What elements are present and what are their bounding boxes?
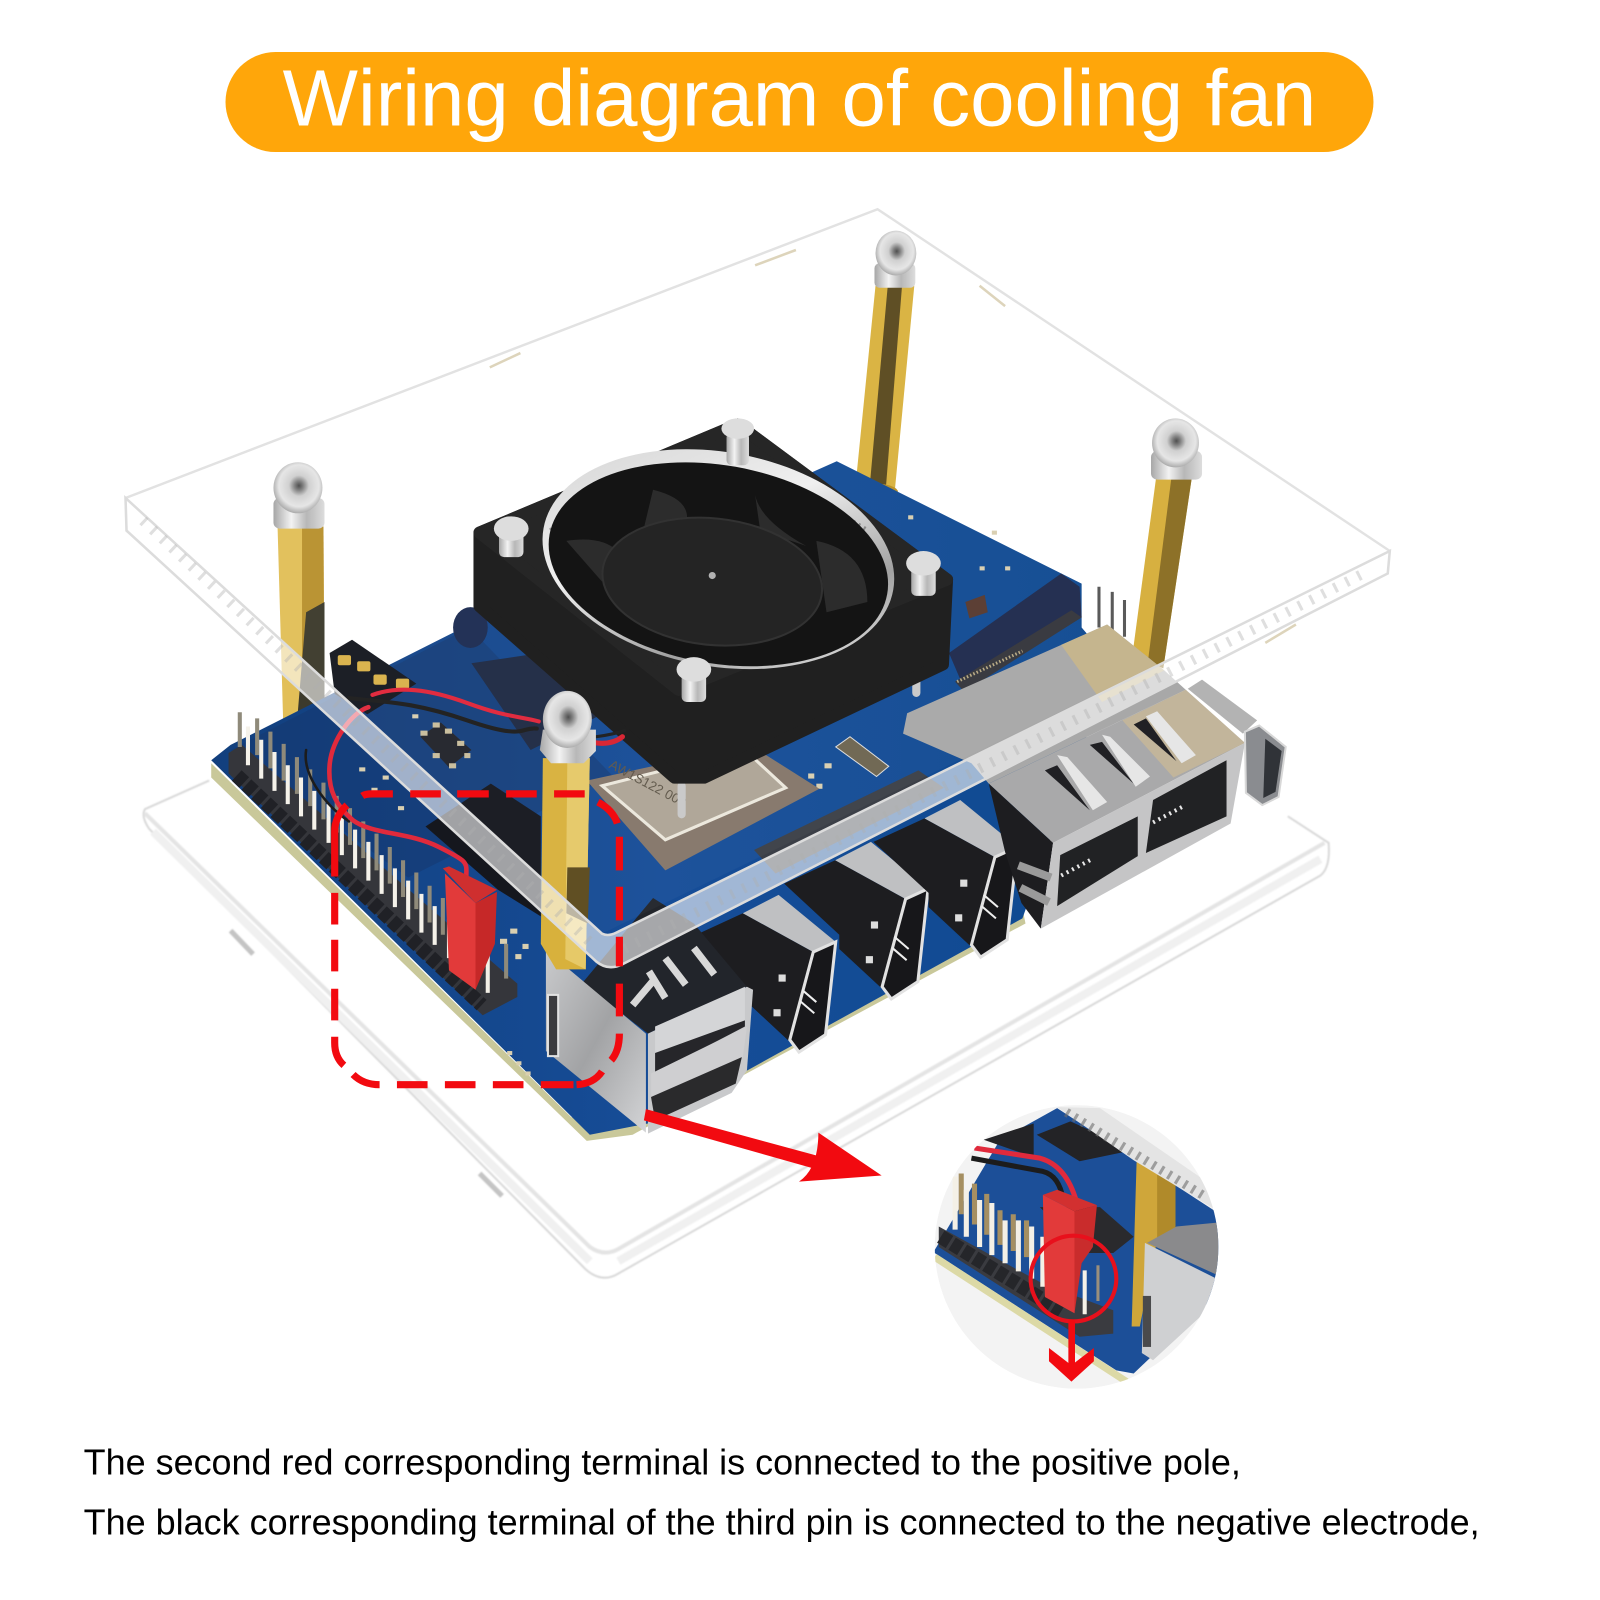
inset wires: [971, 1158, 1063, 1200]
instruction line 1: The second red corresponding terminal is connected to the positive pole,: [84, 1441, 1241, 1482]
polarity arrow: [1049, 1319, 1094, 1382]
ethernet, HDMI and USB ports: [546, 624, 1286, 1134]
cooling fan: [480, 418, 947, 778]
front row pins: [248, 727, 449, 958]
standoff: left: [273, 462, 324, 740]
audio connector with gold contacts: [330, 640, 416, 714]
double USB-A port: [546, 898, 753, 1134]
dark reflection behind HDMI: [754, 770, 944, 873]
HDMI port 2: [784, 842, 928, 999]
rear row pins: [240, 712, 443, 935]
title pill: [226, 52, 1373, 152]
top acrylic plate: [126, 209, 1390, 967]
power capacitor: [453, 607, 488, 648]
fan screws: [494, 418, 941, 702]
dashed selection box: [335, 794, 619, 1085]
ribbon connector: [836, 737, 889, 777]
M.2 slot: [949, 573, 1082, 692]
pin highlight circle: [1031, 1236, 1116, 1321]
board edge: [211, 763, 1026, 1141]
bottom acrylic plate: [144, 781, 1329, 1278]
inset board: [935, 1108, 1218, 1373]
red jumper connector: [443, 866, 497, 990]
instruction line 2: The black corresponding terminal of the third pin is connected to the negative electrode,: [84, 1502, 1480, 1543]
standoff: right: [1133, 418, 1202, 668]
fan frame top face: [480, 424, 947, 690]
inset chips: [1037, 1121, 1134, 1161]
inset USB shell: [1147, 1222, 1218, 1276]
inset third pin: [1083, 1270, 1087, 1314]
acrylic fan ring: [525, 423, 912, 696]
small surface components: [359, 515, 1010, 1076]
HDMI port 1: [692, 895, 836, 1052]
USB-C port: [1188, 680, 1286, 805]
inset board edge: [935, 1257, 1127, 1382]
circuit board: [211, 461, 1112, 1141]
hub centre dot: [709, 572, 716, 579]
ethernet rear block: [903, 624, 1186, 784]
arrow to detail view: [644, 1109, 882, 1182]
board top surface: [211, 461, 1112, 1135]
ethernet front block: [989, 690, 1245, 929]
wiring instructions: [84, 1441, 1480, 1543]
fan frame sides: [480, 424, 947, 778]
GPIO pin header: [229, 712, 517, 1015]
plate top outline: [126, 209, 1390, 551]
front brass standoff: [540, 691, 596, 969]
inset standoff: [1132, 1162, 1158, 1326]
fan opening: [532, 437, 904, 692]
plate edge band: [126, 498, 1390, 967]
processor heat spreader: [587, 745, 819, 870]
pins beside jumper: [486, 954, 490, 993]
rear brass standoffs: [273, 231, 1202, 740]
fan mounting pins: [682, 668, 916, 814]
inset pin header: [939, 1227, 1113, 1337]
rear header pins: [1099, 587, 1124, 637]
chip marking: AW1S122 000: [607, 757, 689, 810]
circular detail inset: [935, 1105, 1218, 1389]
HDMI port 3: [873, 800, 1017, 957]
standoff: back centre: [853, 231, 916, 500]
dark flash chip: [471, 653, 602, 750]
fan wires: [306, 690, 624, 877]
inset pins: [961, 1173, 1027, 1257]
component cluster: [420, 722, 471, 768]
inset plate edge: [1057, 1107, 1218, 1210]
fan blades: [566, 490, 867, 612]
title text: Wiring diagram of cooling fan: [283, 54, 1316, 143]
inset jumper: [1043, 1195, 1074, 1313]
fan hub: [596, 507, 828, 656]
